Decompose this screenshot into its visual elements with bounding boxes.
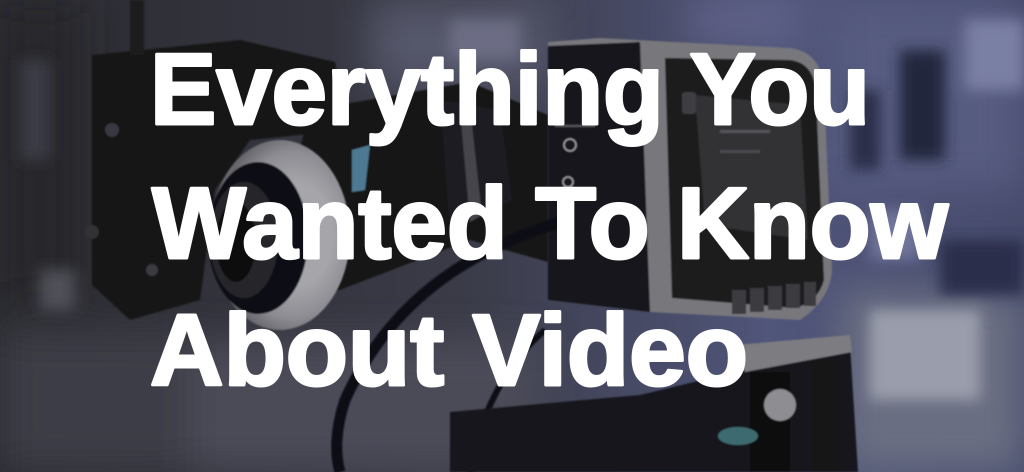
cables: [337, 222, 560, 472]
title: Everything You: [150, 34, 870, 146]
baseplate and mount: [450, 335, 858, 472]
lens barrel: [260, 82, 548, 300]
title: About Video: [150, 295, 748, 407]
title: [150, 34, 948, 407]
title: Wanted To Know: [152, 168, 948, 280]
focus ring and front lens: [208, 140, 350, 330]
camera body: matte box and rig: [85, 0, 350, 320]
camera monitor unit: [548, 38, 832, 320]
